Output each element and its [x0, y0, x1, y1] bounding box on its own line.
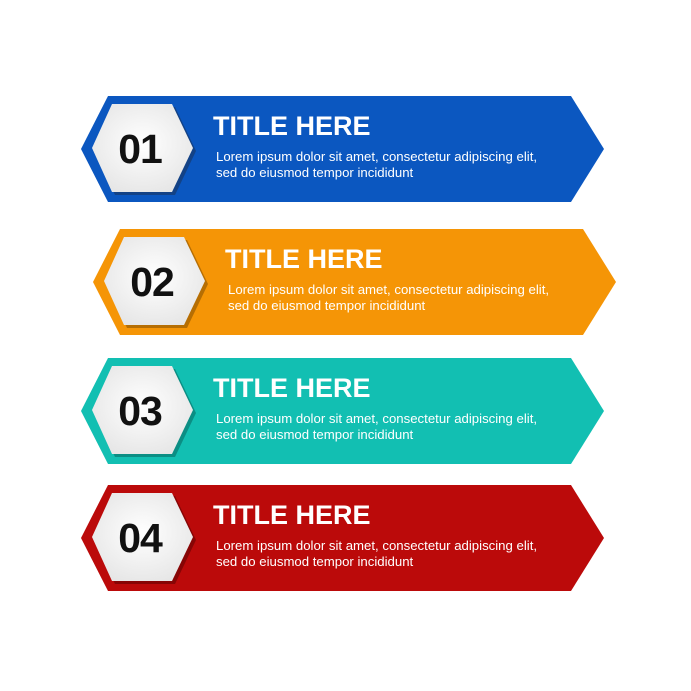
panel: step 02 — [93, 229, 616, 335]
icon: hexagon 03: 03 — [118, 388, 162, 434]
panel: step 04 — [81, 485, 604, 591]
panel: step 03 — [81, 358, 604, 464]
text block 03: sed do eiusmod tempor incididunt — [216, 427, 414, 442]
text block 01: Lorem ipsum dolor sit amet, consectetur adipiscing elit, — [216, 149, 537, 164]
panel: step 01 — [81, 96, 604, 202]
icon: hexagon 01 — [92, 104, 196, 195]
text block 03: Lorem ipsum dolor sit amet, consectetur adipiscing elit, — [216, 411, 537, 426]
heading 01: TITLE HERE — [213, 111, 371, 141]
text block 01: sed do eiusmod tempor incididunt — [216, 165, 414, 180]
icon: hexagon 02 — [104, 237, 208, 328]
icon: hexagon 02: 02 — [130, 259, 174, 305]
text block 04: Lorem ipsum dolor sit amet, consectetur adipiscing elit, — [216, 538, 537, 553]
heading 04: TITLE HERE — [213, 500, 371, 530]
heading 03: TITLE HERE — [213, 373, 371, 403]
text block 04: sed do eiusmod tempor incididunt — [216, 554, 414, 569]
icon: hexagon 04: 04 — [118, 515, 163, 561]
heading 02: TITLE HERE — [225, 244, 383, 274]
icon: hexagon 01: 01 — [118, 126, 162, 172]
icon: hexagon 04 — [92, 493, 196, 584]
icon: hexagon 03 — [92, 366, 196, 457]
text block 02: Lorem ipsum dolor sit amet, consectetur adipiscing elit, — [228, 282, 549, 297]
text block 02: sed do eiusmod tempor incididunt — [228, 298, 426, 313]
